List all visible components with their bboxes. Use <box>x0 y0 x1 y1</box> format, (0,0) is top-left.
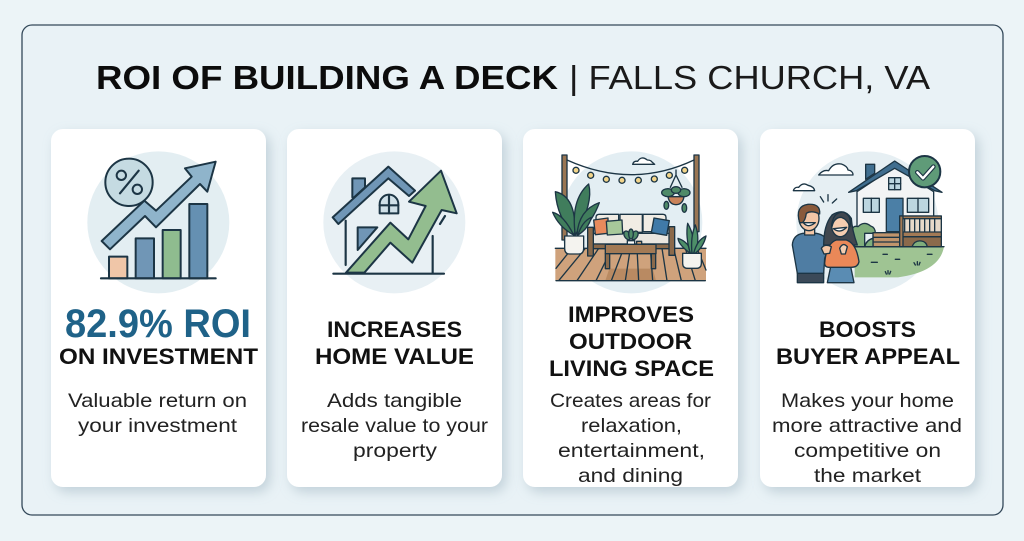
description: Makes your home <box>781 390 954 412</box>
icon: furnished deck with string lights <box>553 151 706 293</box>
heading: BOOSTS <box>819 317 916 342</box>
description: your investment <box>78 415 238 437</box>
heading: HOME VALUE <box>315 344 474 369</box>
description: competitive on <box>794 440 941 462</box>
heading <box>315 317 474 369</box>
description <box>550 390 712 487</box>
title <box>96 59 930 96</box>
description: resale value to your <box>301 415 489 437</box>
description: more attractive and <box>772 415 962 437</box>
description <box>301 390 489 462</box>
heading: LIVING SPACE <box>549 356 714 381</box>
description: Creates areas for <box>550 390 712 412</box>
heading: BUYER APPEAL <box>776 344 960 369</box>
description: and dining <box>578 465 683 487</box>
panel: improves outdoor living space <box>523 129 738 487</box>
description: property <box>353 440 437 462</box>
heading: 82.9% ROI: 82.9% ROI <box>65 302 251 346</box>
icon: house with rising arrow <box>323 151 465 293</box>
heading: on investment: ON INVESTMENT <box>59 344 259 369</box>
panel: ROI on investment <box>51 129 266 487</box>
icon: happy couple and house with check badge <box>792 151 944 293</box>
title: ROI OF BUILDING A DECK <box>96 59 558 96</box>
panel: boosts buyer appeal <box>760 129 975 487</box>
panel: increases home value <box>287 129 502 487</box>
heading <box>776 317 960 369</box>
icon: rising bar chart with percent badge <box>87 151 229 293</box>
description: entertainment, <box>558 440 705 462</box>
description: relaxation, <box>581 415 682 437</box>
description <box>68 390 247 437</box>
heading <box>549 302 714 381</box>
heading: INCREASES <box>327 317 462 342</box>
title: | FALLS CHURCH, VA <box>569 59 930 96</box>
description <box>772 390 962 487</box>
heading: OUTDOOR <box>569 329 692 354</box>
description: the market <box>814 465 922 487</box>
heading: IMPROVES <box>568 302 694 327</box>
description: Valuable return on <box>68 390 247 412</box>
description: Adds tangible <box>327 390 462 412</box>
